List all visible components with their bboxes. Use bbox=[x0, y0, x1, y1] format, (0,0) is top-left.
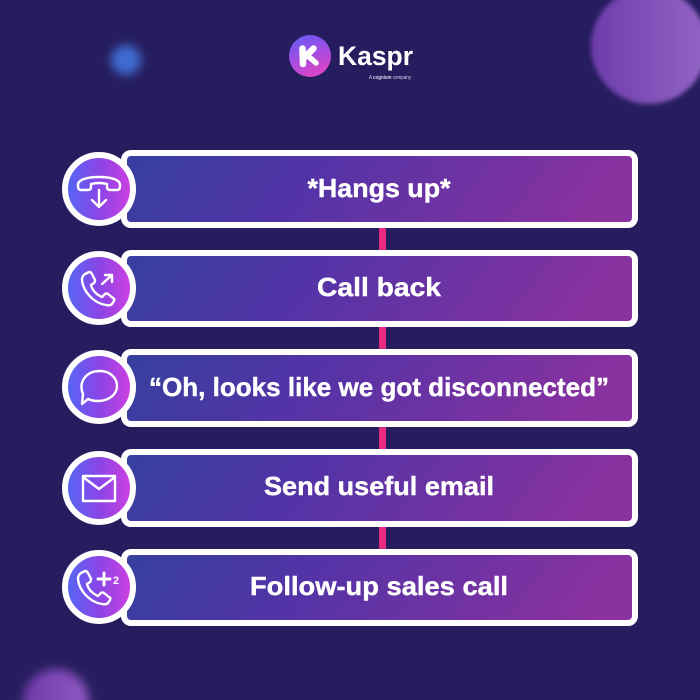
step 3 icon bbox=[65, 353, 133, 421]
step 5 label: Follow-up sales call bbox=[250, 571, 508, 601]
logo icon bbox=[289, 35, 331, 77]
step 1: Hangs up bbox=[65, 153, 635, 225]
step 4 icon bbox=[65, 454, 133, 522]
step 5: Follow-up sales call bbox=[65, 552, 635, 623]
step 4: Send useful email bbox=[65, 452, 635, 524]
step 4 bar bbox=[124, 452, 635, 524]
step 3 bar bbox=[124, 352, 635, 424]
step 1 bar bbox=[124, 153, 635, 225]
connector lines bbox=[379, 227, 386, 551]
step 2 icon bbox=[65, 254, 133, 322]
decorative blurred blue orb bbox=[111, 45, 141, 75]
logo: Kaspr bbox=[289, 35, 413, 81]
step 1 icon bbox=[65, 155, 133, 223]
step 5 icon: 2 bbox=[113, 575, 119, 587]
logo tagline: A cognism company bbox=[369, 75, 411, 81]
step 3 label: “Oh, looks like we got disconnected” bbox=[149, 372, 609, 402]
logo wordmark: Kaspr bbox=[338, 41, 413, 71]
decorative purple orb bottom left bbox=[23, 669, 89, 700]
step 3: disconnected quote bbox=[65, 352, 635, 424]
step 1 label: *Hangs up* bbox=[308, 173, 451, 203]
step 2 label: Call back bbox=[317, 272, 442, 302]
step 2: Call back bbox=[65, 253, 635, 324]
decorative purple orb top right bbox=[591, 0, 700, 104]
step 4 label: Send useful email bbox=[264, 471, 494, 501]
step 5 bar bbox=[124, 552, 635, 623]
step 2 bar bbox=[124, 253, 635, 324]
step 5 icon bbox=[65, 553, 133, 621]
